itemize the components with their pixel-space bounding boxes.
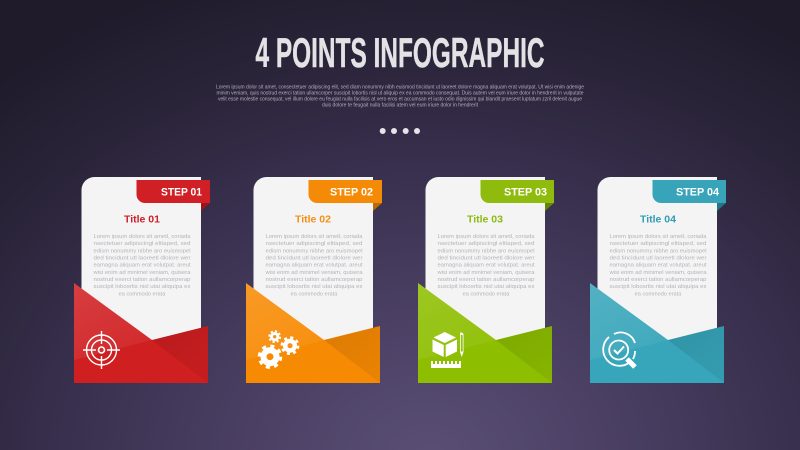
body text: nostrud exerci tation aullamcorperap bbox=[610, 277, 706, 283]
intro paragraph: velit esse molestie consequat, vel illum dolore eu feugiat nulla facilisis at vero eros et accumsan et iusto odio dignissim qui blandit praesent luptatum zzril delenit augue bbox=[218, 97, 582, 103]
panel: step 02 bbox=[246, 177, 382, 383]
icon: magnifier with check bbox=[603, 332, 635, 367]
ribbon: step 04 bbox=[652, 180, 726, 211]
pocket bbox=[418, 283, 552, 383]
ribbon: step 01 bbox=[136, 180, 210, 211]
body text: suscipit lobosrtis nisl utai aliquipa ex bbox=[266, 284, 363, 290]
body text: wisi enim ad minimel veniam, quisera bbox=[436, 270, 535, 276]
icon: target bbox=[83, 331, 120, 369]
body text bbox=[436, 234, 535, 297]
body text: edism nonummy nibhe aro euismopel bbox=[94, 248, 190, 254]
card sheet bbox=[598, 177, 717, 342]
body text: ded tincidunt utl laoreetl dlolore wer bbox=[610, 256, 707, 262]
panel: step 04 bbox=[590, 177, 726, 383]
body text: edism nonummy nibhe aro euismopel bbox=[438, 248, 534, 254]
body text: ded tincidunt utl laoreetl dlolore wer bbox=[94, 256, 191, 262]
body text: edism nonummy nibhe aro euismopel bbox=[266, 248, 362, 254]
body text: nostrud exerci tation aullamcorperap bbox=[94, 277, 190, 283]
panel: step 01 bbox=[74, 177, 210, 383]
body text: eamagna aliquam erat volutpat. areut bbox=[610, 263, 707, 269]
body text: wisi enim ad minimel veniam, quisera bbox=[92, 270, 191, 276]
heading: title 03: Title 03 bbox=[467, 214, 503, 226]
heading: title 02: Title 02 bbox=[295, 214, 331, 226]
intro paragraph bbox=[216, 85, 584, 109]
body text: ea commodo erata bbox=[291, 291, 338, 297]
pocket bbox=[590, 283, 724, 383]
ribbon: step 04: STEP 04 bbox=[676, 186, 720, 198]
body text: nsectetuer adipiscingl elitaped, sed bbox=[266, 241, 362, 247]
body text bbox=[92, 234, 191, 297]
ribbon: step 03 bbox=[480, 180, 554, 211]
body text: ea commodo erata bbox=[119, 291, 166, 297]
card sheet bbox=[82, 177, 201, 342]
body text: eamagna aliquam erat volutpat. areut bbox=[438, 263, 535, 269]
heading: title 01: Title 01 bbox=[124, 214, 160, 226]
heading: title 04: Title 04 bbox=[640, 214, 676, 226]
body text: eamagna aliquam erat volutpat. areut bbox=[94, 263, 191, 269]
ribbon: step 02 bbox=[308, 180, 382, 211]
title: 4 POINTS INFOGRAPHIC bbox=[256, 29, 544, 76]
body text: Lorem ipsum dolors sit ametl, coriada bbox=[438, 234, 535, 240]
body text: suscipit lobosrtis nisl utai aliquipa ex bbox=[438, 284, 535, 290]
card sheet bbox=[254, 177, 373, 342]
body text: nostrud exerci tation aullamcorperap bbox=[266, 277, 362, 283]
body text: wisi enim ad minimel veniam, quisera bbox=[608, 270, 707, 276]
body text: ded tincidunt utl laoreetl dlolore wer bbox=[266, 256, 363, 262]
body text: eamagna aliquam erat volutpat. areut bbox=[266, 263, 363, 269]
pagination dots bbox=[380, 128, 420, 134]
body text: nsectetuer adipiscingl elitaped, sed bbox=[610, 241, 706, 247]
body text: suscipit lobosrtis nisl utai aliquipa ex bbox=[94, 284, 191, 290]
body text: nsectetuer adipiscingl elitaped, sed bbox=[94, 241, 190, 247]
body text: nostrud exerci tation aullamcorperap bbox=[438, 277, 534, 283]
intro paragraph: duis dolore te feugait nulla facilisi atem vel eum iriure dolor in hendrerit bbox=[322, 103, 479, 109]
intro paragraph: Lorem ipsum dolor sit amet, consectetuer adipiscing elit, sed diam nonummy nibh euismod tincidunt ut laoreet dolore magna aliquam erat volutpat. Ut wisi enim adenige bbox=[216, 85, 584, 91]
body text: ded tincidunt utl laoreetl dlolore wer bbox=[438, 256, 535, 262]
body text: suscipit lobosrtis nisl utai aliquipa ex bbox=[610, 284, 707, 290]
body text: Lorem ipsum dolors sit ametl, coriada bbox=[610, 234, 707, 240]
body text: ea commodo erata bbox=[635, 291, 682, 297]
body text: wisi enim ad minimel veniam, quisera bbox=[264, 270, 363, 276]
body text: ea commodo erata bbox=[463, 291, 510, 297]
pocket bbox=[246, 283, 380, 383]
body text bbox=[264, 234, 363, 297]
body text: Lorem ipsum dolors sit ametl, coriada bbox=[94, 234, 191, 240]
icon: gears bbox=[260, 331, 298, 367]
panel: step 03 bbox=[418, 177, 554, 383]
body text: Lorem ipsum dolors sit ametl, coriada bbox=[266, 234, 363, 240]
ribbon: step 01: STEP 01 bbox=[161, 186, 202, 198]
ribbon: step 03: STEP 03 bbox=[504, 186, 547, 198]
body text: nsectetuer adipiscingl elitaped, sed bbox=[438, 241, 534, 247]
intro paragraph: minim veniam, quis nostrud exerci tation ullamcorper suscipit lobortis nisl ut aliquip ex ea commodo consequat. Duis autem vel eum iriure dolor in hendrerit in vulputate bbox=[216, 91, 584, 97]
icon: cube, pencil and ruler bbox=[431, 332, 464, 368]
card sheet bbox=[426, 177, 545, 342]
body text bbox=[608, 234, 707, 297]
pocket bbox=[74, 283, 208, 383]
body text: edism nonummy nibhe aro euismopel bbox=[610, 248, 706, 254]
ribbon: step 02: STEP 02 bbox=[330, 186, 373, 198]
